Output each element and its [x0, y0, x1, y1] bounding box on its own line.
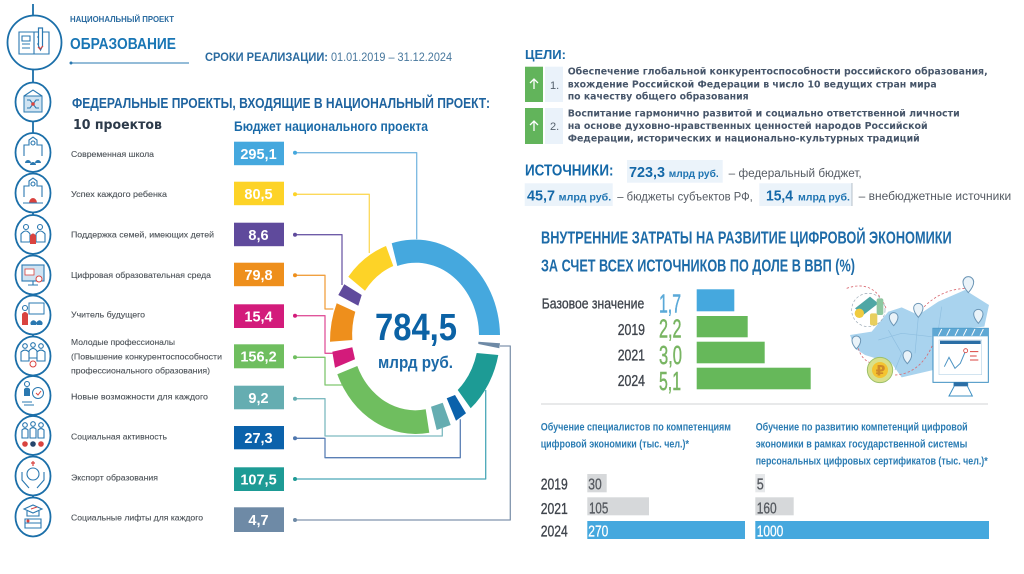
training chart left: 2019	[541, 476, 568, 493]
training chart left: 270	[588, 524, 608, 541]
funding sources: 45,7	[527, 188, 555, 205]
training chart left: 105	[589, 500, 608, 518]
goal 2: Федерации, исторических и национально-культурных традиций	[568, 134, 920, 145]
project name labels: профессионального образования)	[71, 366, 210, 376]
heading: budget: Бюджет национального проекта	[234, 119, 428, 134]
funding sources: – федеральный бюджет,	[729, 168, 862, 180]
training chart right: Обучение по развитию компетенций цифровой	[756, 422, 968, 434]
funding sources: – внебюджетные источники	[859, 191, 1011, 203]
donut total: 784,5	[375, 307, 457, 349]
icon: new opportunities	[16, 376, 50, 415]
project name labels: Поддержка семей, имеющих детей	[71, 230, 214, 240]
training chart left: 30	[588, 476, 602, 493]
funding sources: – бюджеты субъектов РФ,	[617, 192, 753, 204]
implementation dates	[205, 52, 453, 64]
bar chart: share of GDP: 2024	[618, 373, 645, 390]
goal 1: по качеству общего образования	[568, 91, 749, 102]
icon: social lifts books	[16, 498, 50, 536]
funding sources: 723,3	[629, 164, 665, 181]
icon: family support	[16, 215, 50, 254]
heading: goals: ЦЕЛИ:	[525, 47, 566, 62]
training chart left	[541, 422, 745, 541]
training chart right: 5	[757, 476, 764, 493]
heading: digital economy: ЗА СЧЕТ ВСЕХ ИСТОЧНИКОВ ПО ДОЛЕ В ВВП (%)	[541, 256, 855, 276]
goal 2: Воспитание гармонично развитой и социально ответственной личности	[568, 109, 960, 120]
divider	[541, 403, 988, 405]
heading: national project	[70, 13, 189, 64]
training chart right: 160	[757, 500, 777, 518]
project name labels: Молодые профессионалы	[71, 337, 175, 347]
bar chart: share of GDP: 1,7	[659, 288, 681, 318]
heading: national project: ОБРАЗОВАНИЕ	[70, 36, 176, 53]
project name labels: Учитель будущего	[71, 310, 145, 320]
project name labels: Современная школа	[71, 149, 154, 159]
project count: 10 проектов	[73, 118, 162, 133]
budget value boxes: 4,7	[248, 513, 269, 529]
project name labels	[71, 149, 222, 522]
heading: national project: НАЦИОНАЛЬНЫЙ ПРОЕКТ	[70, 13, 175, 24]
donut chart	[330, 240, 500, 434]
funding sources: 15,4	[766, 188, 794, 205]
budget value boxes: 8,6	[248, 228, 269, 244]
project name labels: Социальная активность	[71, 432, 168, 442]
bar chart: share of GDP: 3,0	[659, 340, 682, 370]
budget value boxes: 80,5	[244, 187, 273, 203]
project name labels: Социальные лифты для каждого	[71, 512, 203, 522]
budget value boxes: 156,2	[240, 350, 277, 366]
donut total: млрд руб.	[378, 353, 453, 372]
goal 2	[525, 108, 960, 145]
training chart left: Обучение специалистов по компетенциям	[541, 422, 731, 434]
donut total	[375, 307, 457, 372]
funding sources: млрд руб.	[559, 192, 611, 204]
bar chart: share of GDP: 2019	[618, 322, 645, 339]
goal 1: Обеспечение глобальной конкурентоспособности российского образования,	[568, 67, 988, 78]
bar chart: share of GDP: 2,2	[659, 314, 682, 344]
heading: digital economy	[541, 226, 952, 276]
bar chart: share of GDP: Базовое значение	[542, 296, 644, 312]
budget value boxes: 107,5	[240, 472, 277, 488]
bar chart: share of GDP: 2021	[618, 348, 645, 365]
goal 1: 1.	[550, 80, 559, 92]
goal 1: вхождение Российской Федерации в число 10 ведущих стран мира	[568, 79, 937, 90]
implementation dates: 01.01.2019 – 31.12.2024	[331, 52, 453, 64]
implementation dates: СРОКИ РЕАЛИЗАЦИИ:	[205, 52, 328, 64]
goal 1	[525, 67, 988, 102]
bar chart: share of GDP: 5,1	[659, 366, 681, 396]
funding sources: ИСТОЧНИКИ:	[525, 163, 614, 180]
illustration: russia map, coins, ruble, monitor	[847, 277, 989, 396]
icon: child success	[16, 174, 50, 212]
budget value boxes	[234, 142, 284, 532]
goal 2: на основе духовно-нравственных ценностей народов Российской	[568, 121, 928, 132]
icon: federal projects diagram	[16, 82, 50, 122]
funding sources: млрд руб.	[669, 168, 719, 180]
icon: young professionals	[16, 336, 50, 376]
budget value boxes: 295,1	[240, 147, 277, 163]
training chart right	[755, 422, 989, 541]
icon: teacher of the future	[16, 296, 50, 334]
icon: education export	[16, 456, 50, 496]
budget value boxes: 9,2	[248, 391, 269, 407]
training chart left: 2021	[541, 501, 568, 518]
project name labels: Новые возможности для каждого	[71, 392, 208, 402]
connector lines from values to donut	[293, 151, 510, 522]
training chart right: экономики в рамках государственной системы	[756, 438, 967, 450]
icon: national project book	[8, 16, 62, 70]
funding sources: млрд руб.	[798, 192, 850, 204]
bar chart: share of GDP	[542, 288, 811, 396]
icon column: project circles	[8, 4, 62, 536]
training chart right: 1000	[757, 524, 783, 541]
project name labels: Успех каждого ребенка	[71, 189, 167, 199]
project name labels: (Повышение конкурентоспособности	[71, 352, 222, 362]
budget value boxes: 15,4	[244, 310, 273, 326]
illustration: russia map, coins, ruble, monitor: ₽	[876, 362, 886, 378]
funding sources	[525, 160, 1011, 206]
icon: social activity	[16, 416, 50, 455]
budget value boxes: 79,8	[244, 268, 273, 284]
goal 2: 2.	[550, 121, 559, 133]
training chart left: 2024	[541, 524, 568, 541]
project name labels: Экспорт образования	[71, 472, 158, 482]
heading: federal projects: ФЕДЕРАЛЬНЫЕ ПРОЕКТЫ, ВХОДЯЩИЕ В НАЦИОНАЛЬНЫЙ ПРОЕКТ:	[72, 94, 490, 112]
icon: modern school	[16, 133, 50, 172]
training chart left: цифровой экономики (тыс. чел.)*	[541, 438, 690, 450]
icon: digital environment monitor	[16, 256, 50, 294]
budget value boxes: 27,3	[244, 431, 273, 447]
project name labels: Цифровая образовательная среда	[71, 270, 211, 280]
